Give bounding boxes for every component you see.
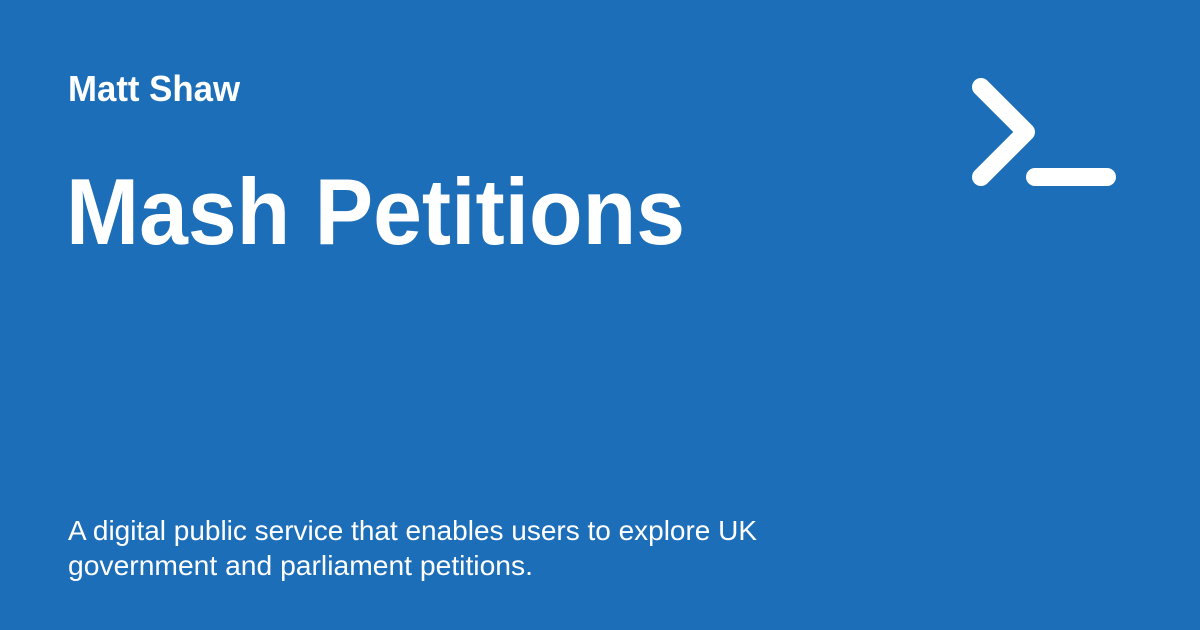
author name: Matt Shaw [68,68,241,109]
description: A digital public service that enables users to explore UK [68,515,757,546]
title: Mash Petitions [66,159,685,264]
description: government and parliament petitions. [68,550,533,581]
description [68,515,757,581]
icon: terminal prompt [981,87,1107,177]
